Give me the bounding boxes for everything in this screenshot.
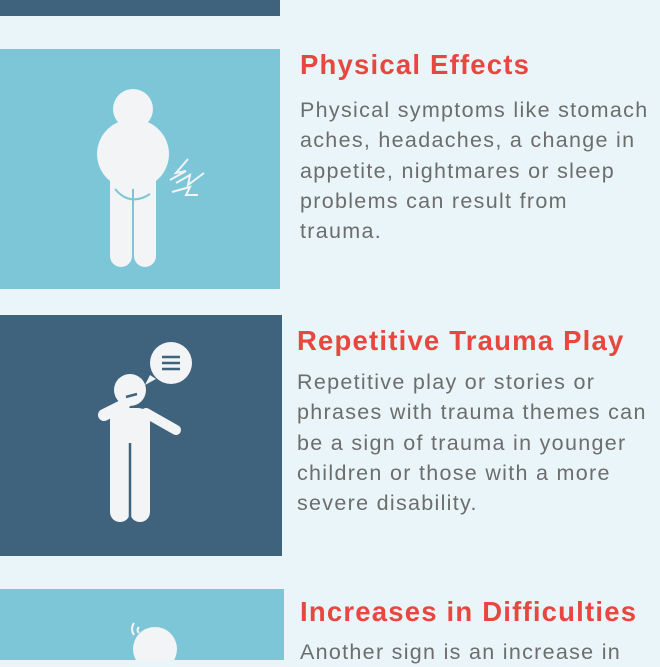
text: repetitive trauma play body: children or those with a more xyxy=(297,461,611,485)
icon: person with stomach ache xyxy=(97,89,204,267)
text: repetitive trauma play body: phrases with trauma themes can xyxy=(297,400,647,424)
panel: top dark (cut off) xyxy=(0,0,280,16)
text: physical effects body xyxy=(300,98,648,243)
text: physical effects body: aches, headaches, a change in xyxy=(300,128,635,152)
text: physical effects body: problems can result from xyxy=(300,189,568,213)
text: repetitive trauma play body: be a sign of trauma in younger xyxy=(297,431,626,455)
icon: talking person with speech bubble xyxy=(98,342,192,522)
panel: physical effects image xyxy=(0,49,280,289)
heading: physical effects: Physical Effects xyxy=(300,49,530,80)
icon: head (cut off) xyxy=(131,622,177,660)
panel: repetitive trauma play image xyxy=(0,315,282,556)
text: physical effects body: trauma. xyxy=(300,219,382,243)
text: increases body (cut off): Another sign is an increase in xyxy=(300,640,621,664)
text: repetitive trauma play body: severe disability. xyxy=(297,491,478,515)
heading: repetitive trauma play: Repetitive Trauma Play xyxy=(297,325,625,356)
heading: increases in difficulties: Increases in Difficulties xyxy=(300,596,637,627)
text: repetitive trauma play body: Repetitive play or stories or xyxy=(297,370,595,394)
text: physical effects body: appetite, nightmares or sleep xyxy=(300,159,615,183)
text: physical effects body: Physical symptoms like stomach xyxy=(300,98,648,122)
text: repetitive trauma play body xyxy=(297,370,647,515)
panel: increases in difficulties image xyxy=(0,589,284,660)
